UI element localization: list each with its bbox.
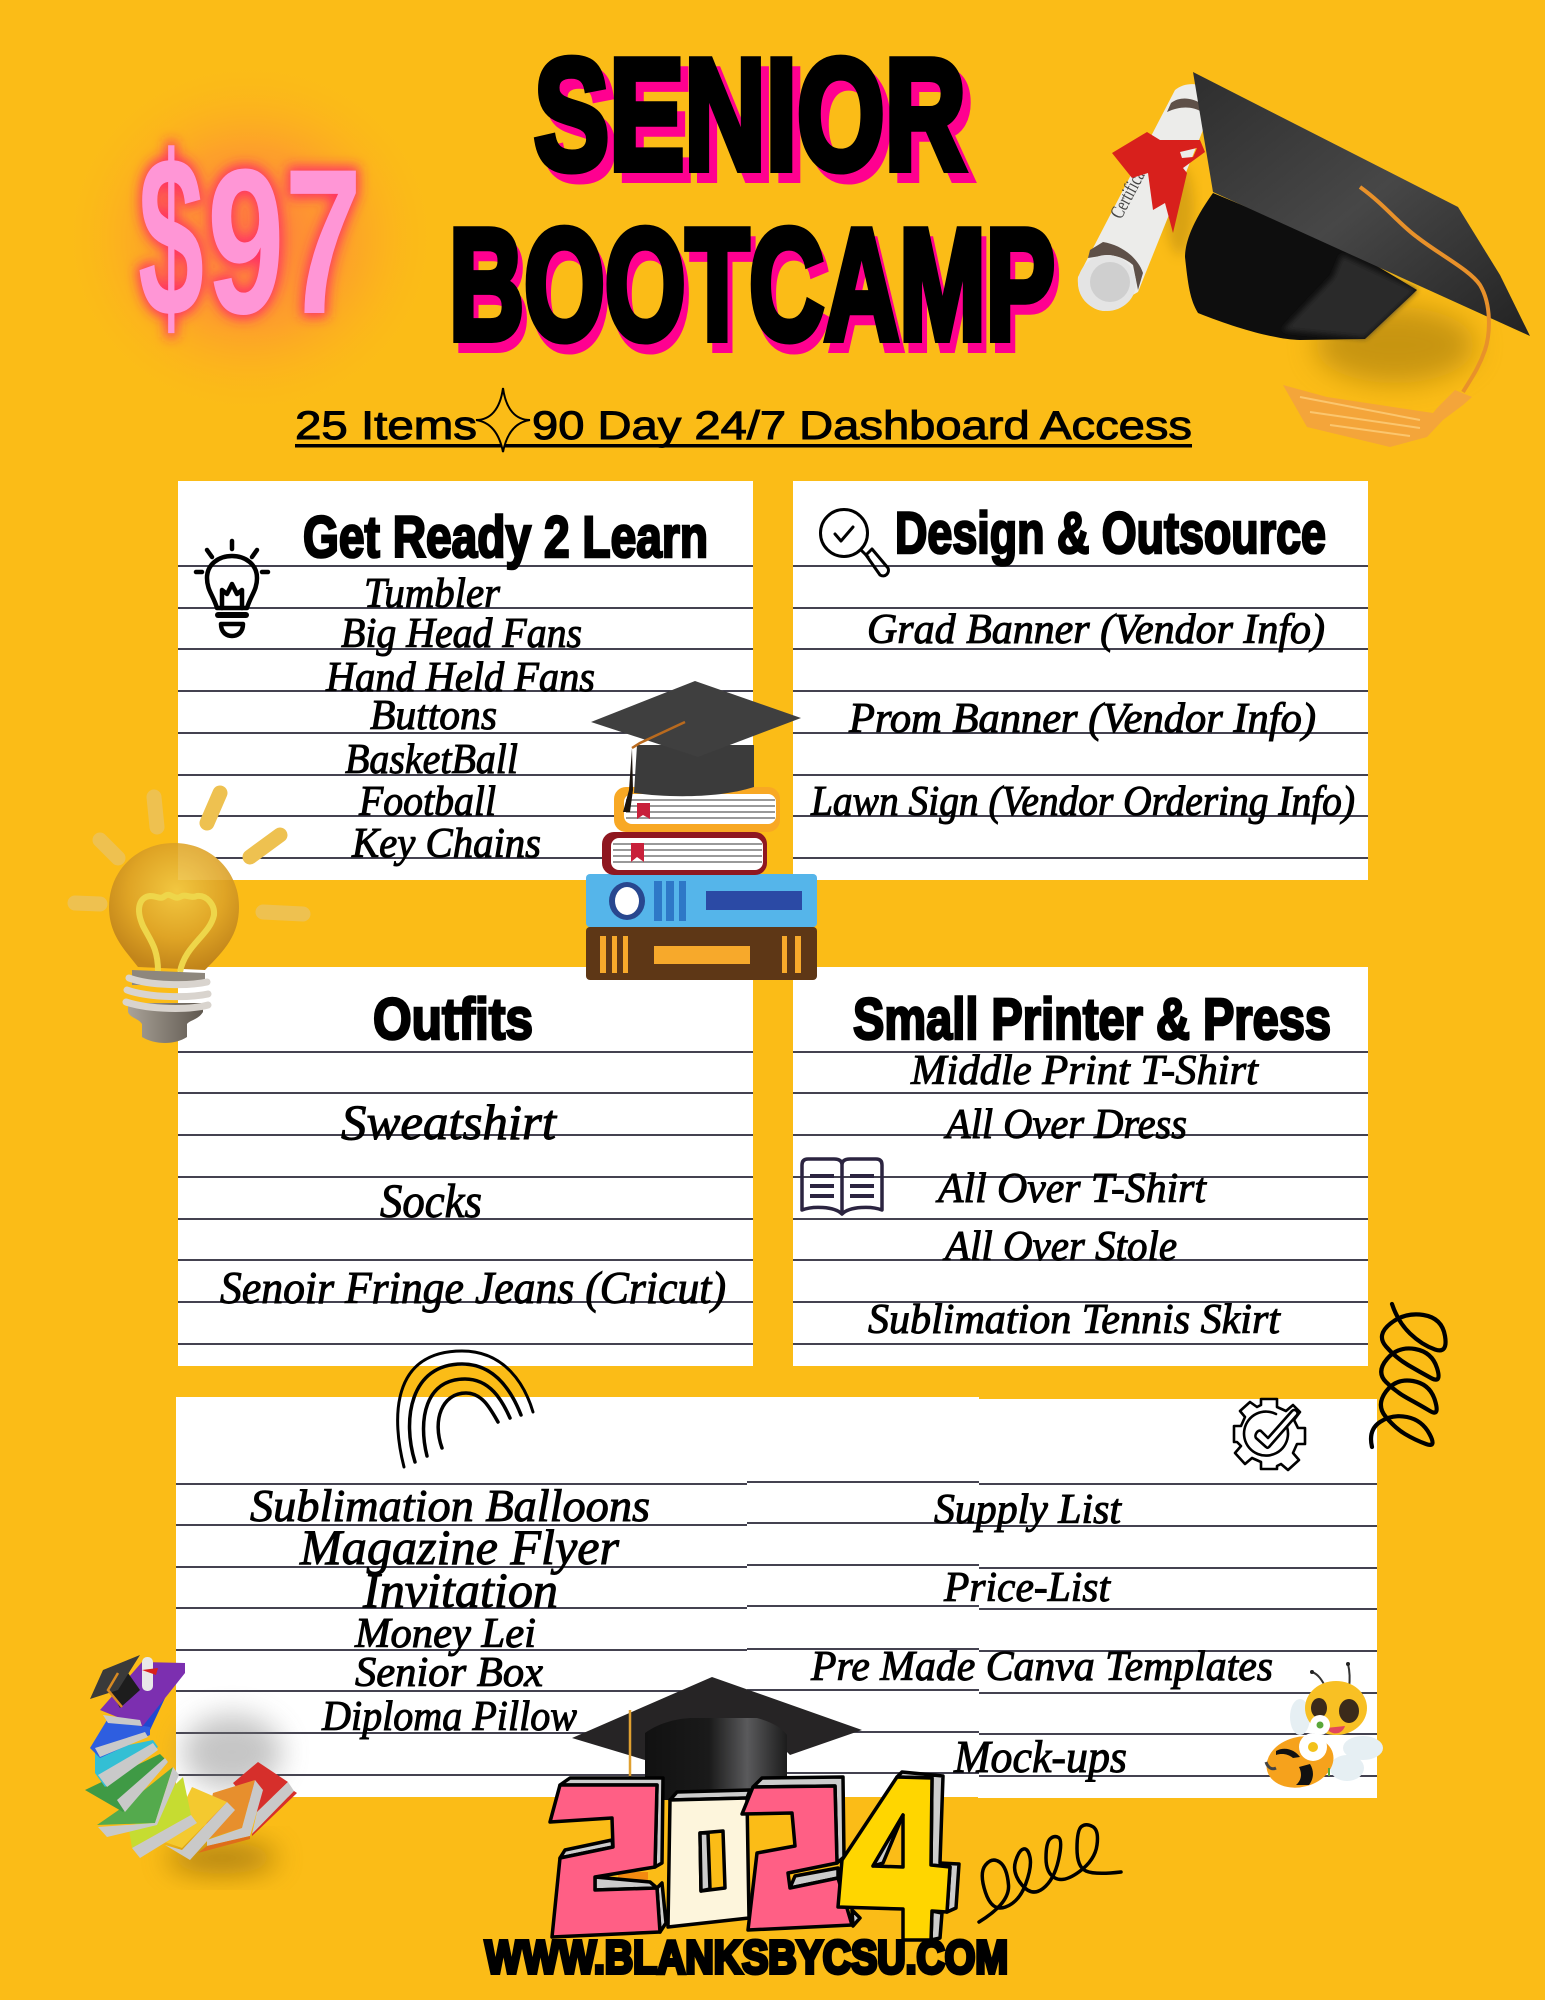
list item: Sweatshirt [341,1094,557,1150]
tassel peek [618,1872,648,1881]
illustration: graduation cap and diploma [1078,72,1530,447]
subtitle: items and access: 25 Items [295,404,477,448]
numeral: 2024 [550,1772,959,1940]
decorative spring bottom [979,1825,1121,1922]
heading: outfits: Outfits [373,987,533,1052]
panel: get ready 2 learn [178,481,753,880]
list item: Grad Banner (Vendor Info) [867,607,1325,653]
title: senior [534,27,974,213]
bulb screw base [126,970,208,1043]
icon: light bulb outline [196,541,268,636]
title: bootcamp: BOOTCAMP [454,207,1060,383]
book: brown [586,927,817,980]
deep blue spine [140,1695,165,1730]
heading: get ready 2 learn: Get Ready 2 Learn [303,505,708,570]
cap board [1193,72,1530,336]
icon: gear with check [1234,1399,1305,1470]
illustration: rainbow book stack [85,1655,297,1874]
heading: small printer and press: Small Printer & Press [853,987,1331,1052]
book: blue [586,874,817,927]
digit 2 depth [560,1778,666,1932]
blue book [90,1720,150,1758]
yellow book [165,1787,235,1860]
panel: design and outsource [793,481,1368,880]
list item: Prom Banner (Vendor Info) [848,696,1316,742]
list item: Tumbler [364,571,501,617]
digit 2 [550,1785,660,1937]
digit 4 [838,1777,950,1940]
digit 2 right [742,1786,852,1930]
list item: Lawn Sign (Vendor Ordering Info) [810,779,1355,825]
red ribbon [1112,132,1205,233]
list item: Price-List [943,1565,1111,1611]
diploma scroll: Certificate [1106,157,1155,222]
subtitle: items and access [295,388,1192,452]
book: red [602,832,767,875]
icon: open book [802,1159,882,1214]
green upper book [85,1754,168,1812]
panel: outfits [178,967,753,1366]
icon: rainbow arcs [398,1351,533,1467]
list item: Pre Made Canva Templates [810,1644,1273,1690]
price: $97 with neon glow [60,58,440,418]
light rays [75,793,303,914]
list item: Mock-ups [953,1731,1127,1782]
panel: small printer and press [793,967,1368,1366]
list item: Buttons [370,693,497,739]
price: $97 with neon glow: 97 [207,126,362,357]
tassel cord [1360,187,1489,392]
green lower book [97,1767,179,1837]
orange book [198,1780,263,1853]
list item: All Over T-Shirt [935,1166,1207,1212]
list item: All Over Stole [942,1224,1177,1270]
tassel [1283,385,1472,447]
list item: Sublimation Tennis Skirt [868,1297,1281,1343]
price: $97 with neon glow: 97 [207,126,362,357]
list item: Diploma Pillow [321,1694,577,1740]
digit 4 depth [897,1772,959,1940]
cap skull [1185,193,1417,340]
list item: Big Head Fans [341,611,582,657]
mini grad cap [90,1655,140,1708]
icon: four point sparkle [476,388,530,452]
list item: Supply List [934,1487,1122,1533]
diploma scroll [1078,84,1205,311]
digit 0 [668,1798,749,1927]
list item: Senior Box [355,1650,543,1696]
lime book [129,1777,197,1858]
illustration: satin grad cap [572,1677,862,1800]
list item: Money Lei [354,1611,536,1657]
title: bootcamp [449,197,1060,383]
title: senior: SENIOR [542,37,974,213]
subtitle: items and access: 90 Day 24/7 Dashboard Access [532,404,1192,448]
list item: All Over Dress [943,1102,1187,1148]
cyan book [95,1740,158,1787]
heading: design and outsource: Design & Outsource [895,501,1326,566]
list item: Sublimation Balloons [250,1480,650,1531]
decorative spring right [1371,1304,1446,1447]
illustration: glowing light bulb [75,793,303,1043]
website url: WWW.BLANKSBYCSU.COM [485,1931,1008,1983]
scribbled cap [634,745,754,796]
price: $97 with neon glow: $ [138,108,204,365]
mini scroll [142,1657,153,1691]
list item: Socks [380,1175,482,1228]
list item: Football [358,779,496,825]
list item: Magazine Flyer [299,1519,620,1575]
list item: Senoir Fringe Jeans (Cricut) [220,1262,726,1313]
panel: bottom lists [176,1397,1377,1798]
list item: BasketBall [345,737,518,783]
illustration: cute bee [1261,1662,1383,1795]
list item: Middle Print T-Shirt [910,1048,1259,1094]
icon: magnifier with check [820,510,888,576]
list item: Hand Held Fans [325,655,595,701]
illustration: stacked books with cap [586,681,817,980]
list item: Key Chains [351,821,541,867]
price: $97 with neon glow: $ [138,108,204,365]
red book [233,1762,297,1836]
purple book [100,1662,185,1727]
title: senior: SENIOR [534,27,966,203]
digit 0 depth [670,1790,750,1800]
book: orange [614,787,780,832]
title: bootcamp: BOOTCAMP [449,197,1055,373]
list item: Invitation [362,1562,558,1618]
digit 2 right depth [753,1777,860,1926]
